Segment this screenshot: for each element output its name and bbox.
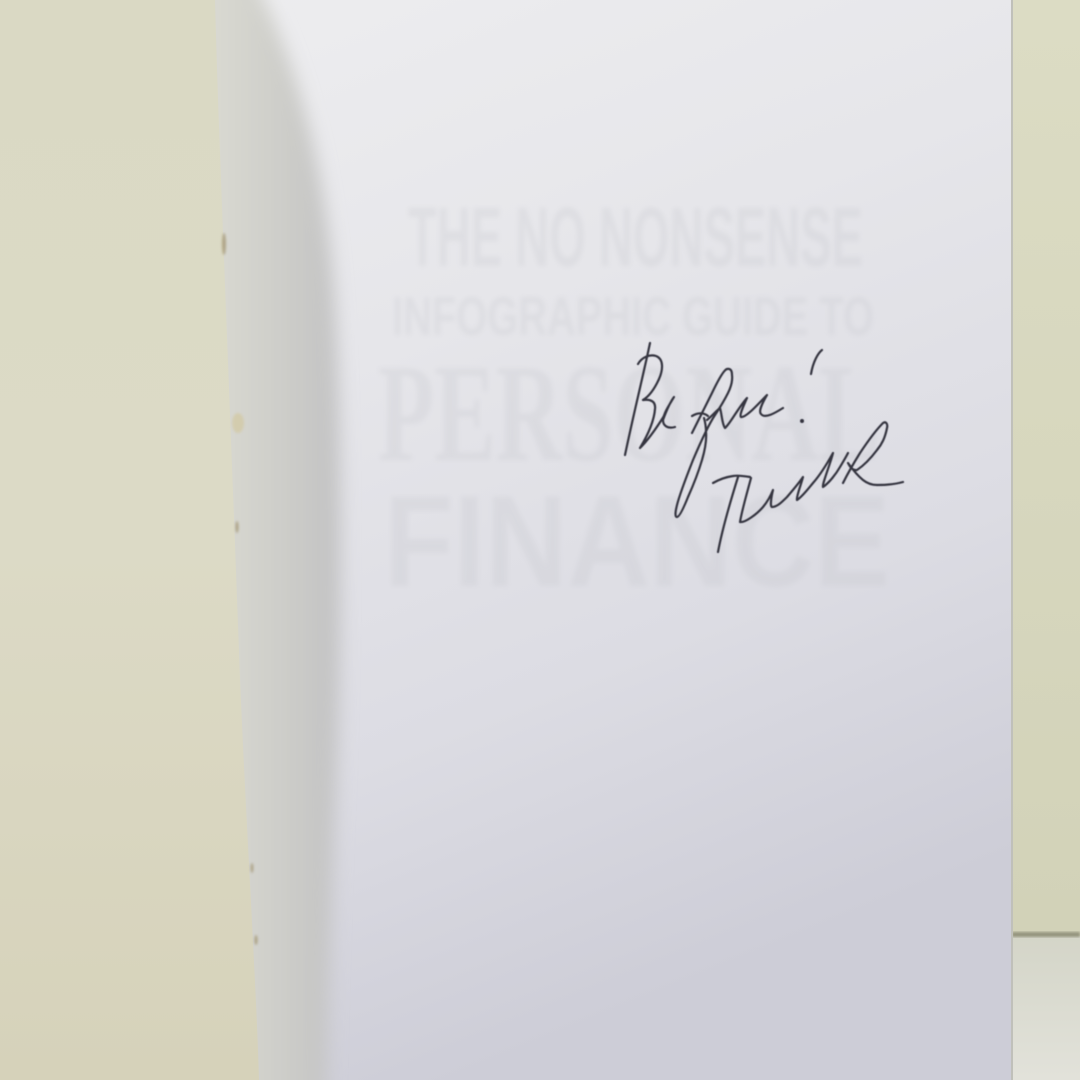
bleed-through cover title: FINANCE (384, 468, 890, 614)
stain near the spine (232, 413, 244, 433)
letter T of Russell (713, 476, 750, 483)
letter f long loop (676, 369, 732, 517)
binding staples and stains (222, 233, 258, 945)
handwritten signature: Be free! Russell (625, 343, 903, 552)
white surface, lower right (1012, 932, 1080, 1080)
left book page (0, 0, 259, 1080)
letters r e e (707, 395, 783, 428)
letter e (663, 397, 675, 428)
bleed-through cover title (378, 190, 890, 614)
letters u s s e (740, 453, 848, 522)
right book page (215, 0, 1013, 1080)
final l loop and tail (843, 422, 903, 485)
gutter shadow on right page (180, 0, 340, 1080)
bleed-through cover title: INFOGRAPHIC GUIDE TO (392, 285, 874, 347)
f crossbar (692, 413, 708, 416)
letter B bowls (638, 355, 664, 448)
background wall (1000, 0, 1080, 940)
exclamation mark (811, 350, 822, 374)
letter B stem (625, 343, 650, 455)
